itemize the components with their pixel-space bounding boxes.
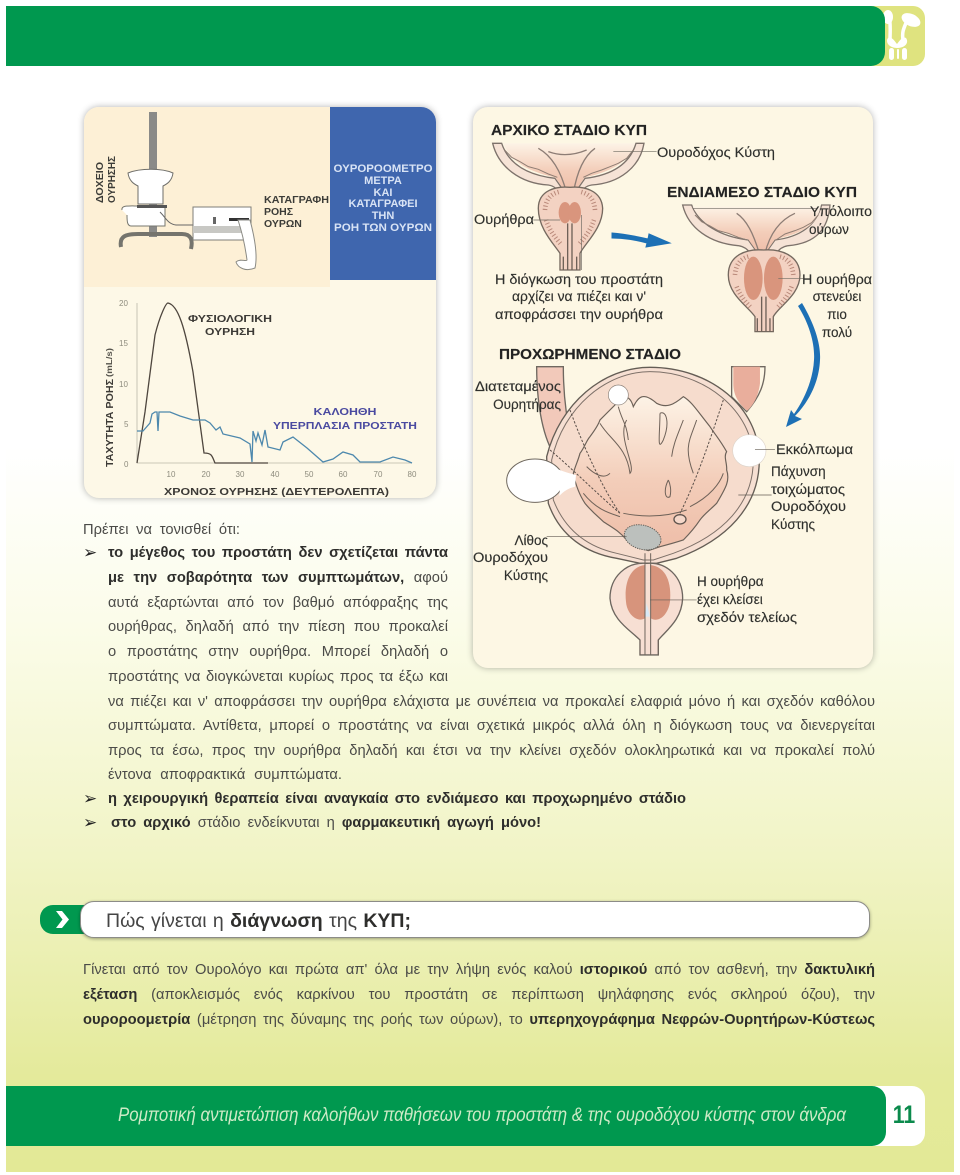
axis numbers: 30 (236, 470, 245, 479)
advanced stage diagram (507, 367, 775, 655)
stage labels: έχει κλείσει (697, 592, 763, 607)
stage labels: Λίθος (514, 533, 548, 548)
bullet arrow: ➢ (83, 543, 97, 563)
stage labels: σχεδόν τελείως (697, 610, 798, 625)
blue caption box (330, 107, 436, 280)
text block: diagnosis (83, 962, 875, 1028)
header band (6, 6, 925, 66)
axis numbers: 70 (374, 470, 383, 479)
stage labels (473, 123, 872, 625)
axis numbers: 60 (339, 470, 348, 479)
axis numbers: 0 (124, 460, 129, 469)
blue arrow: intermediate to advanced (786, 303, 820, 427)
stage labels: στενεύει (813, 289, 861, 304)
uroflowmeter device (121, 112, 256, 270)
device labels: ΟΥΡΩΝ (264, 218, 302, 230)
stage labels: πιο (827, 307, 847, 322)
text block: key points: ουρήθρας, δηλαδή από την πίεση που προκαλεί (108, 619, 448, 635)
section heading: Πώς γίνεται η διάγνωση της ΚΥΠ; (106, 910, 411, 932)
text block: key points: στο αρχικό στάδιο ενδείκνυται η φαρμακευτική αγωγή μόνο! (111, 815, 541, 831)
text block: diagnosis: ουροροομετρία (μέτρηση της δύναμης της ροής των ούρων), το υπερηχογράφημα Νεφρών-Ουρητήρων-Κύστεως (83, 1012, 875, 1028)
axis numbers: 40 (271, 470, 280, 479)
text block: diagnosis: Γίνεται από τον Ουρολόγο και πρώτα απ' όλα με την λήψη ενός καλού ιστορικού από τον ασθενή, την δακτυλική (83, 962, 875, 978)
stage labels: ούρων (809, 222, 849, 237)
intermediate stage diagram (683, 205, 830, 332)
diverticula (507, 459, 563, 502)
text block: key points: να πιέζει και ν' αποφράσσει την ουρήθρα ελάχιστα με συνέπεια να προκαλεί ελαφριά μόνο ή και σχεδόν καθόλου (108, 694, 875, 710)
stage labels: τοιχώματος (771, 482, 846, 497)
footer band (6, 1086, 925, 1146)
flow chart: ΤΑΧΥΤΗΤΑ ΡΟΗΣ (104, 379, 116, 467)
device labels: ΚΑΤΑΓΡΑΦΗ (264, 194, 329, 206)
prostate (610, 563, 683, 655)
flow chart: ΧΡΟΝΟΣ ΟΥΡΗΣΗΣ (ΔΕΥΤΕΡΟΛΕΠΤΑ) (164, 486, 389, 498)
bladder lumen (573, 397, 728, 551)
stage labels: Ουρητήρας (493, 397, 561, 412)
axis numbers: 50 (305, 470, 314, 479)
stage labels: Υπόλοιπο (810, 204, 872, 219)
heading box (80, 901, 870, 938)
stage labels: Η ουρήθρα (802, 272, 872, 287)
blue caption box: ΡΟΗ ΤΩΝ ΟΥΡΩΝ (334, 222, 432, 234)
axis numbers (119, 299, 417, 479)
stage labels: πολύ (822, 325, 852, 340)
stage labels: Ουροδόχος Κύστη (657, 145, 775, 160)
stage labels: Ουροδόχου (771, 499, 846, 514)
bladder stone (622, 521, 664, 554)
stage labels: ΕΝΔΙΑΜΕΣΟ ΣΤΑΔΙΟ ΚΥΠ (667, 185, 857, 201)
stage labels: ΠΡΟΧΩΡΗΜΕΝΟ ΣΤΑΔΙΟ (499, 347, 681, 363)
stage labels: Πάχυνση (771, 464, 826, 479)
panel: BPH stages (473, 107, 873, 668)
flow chart (104, 299, 417, 498)
text block: key points: με την σοβαρότητα των συμπτωμάτων, αφού (108, 570, 448, 586)
green chevron pill (40, 905, 100, 934)
header green bar (6, 6, 885, 66)
text block: key points: ο προστάτης στην ουρήθρα. Μπορεί δηλαδή ο (108, 644, 448, 660)
axis numbers: 15 (119, 339, 128, 348)
initial stage diagram (493, 143, 657, 270)
blue caption box: ΟΥΡΟΡΟΟΜΕΤΡΟ (334, 163, 433, 175)
leader lines (547, 449, 775, 600)
BPH curve (137, 412, 412, 463)
blue arrow: initial to intermediate (612, 233, 670, 247)
chart labels: ΦΥΣΙΟΛΟΓΙΚΗ (188, 313, 272, 325)
axis numbers: 10 (119, 380, 128, 389)
blue caption box: ΤΗΝ (372, 210, 394, 222)
stage labels: Κύστης (771, 517, 816, 532)
stage labels: Η ουρήθρα (697, 574, 764, 589)
axis numbers: 5 (124, 420, 129, 429)
axis numbers: 20 (119, 299, 128, 308)
page number tab (866, 1086, 925, 1146)
device labels (94, 156, 329, 230)
chart labels: ΟΥΡΗΣΗ (205, 326, 255, 338)
text block: diagnosis: εξέταση (αποκλεισμός ενός καρκίνου του προστάτη σε περίπτωση ψηλάφησης ενός σκληρού όζου), την (83, 987, 875, 1003)
text block: key points (83, 522, 875, 833)
device labels: ΟΥΡΗΣΗΣ (106, 156, 118, 203)
text block: key points: Πρέπει να τονισθεί ότι: (83, 522, 240, 538)
bullet arrow: ➢ (83, 813, 97, 833)
stage labels: Διατεταμένος (475, 379, 562, 394)
device labels: ΔΟΧΕΙΟ (94, 162, 106, 203)
text block: key points: το μέγεθος του προστάτη δεν σχετίζεται πάντα (108, 545, 448, 561)
stage labels: Ουροδόχου (473, 550, 548, 565)
bullet arrow: ➢ (83, 789, 97, 809)
blue caption box: ΚΑΤΑΓΡΑΦΕΙ (348, 198, 418, 210)
peach upper background (84, 107, 330, 287)
stage labels: Κύστης (504, 568, 548, 583)
stage labels: ΑΡΧΙΚΟ ΣΤΑΔΙΟ ΚΥΠ (491, 123, 647, 139)
axis numbers: 80 (408, 470, 417, 479)
stage labels: αποφράσσει την ουρήθρα (495, 307, 663, 322)
chart labels: ΥΠΕΡΠΛΑΣΙΑ ΠΡΟΣΤΑΤΗ (273, 420, 417, 432)
axis numbers: 20 (202, 470, 211, 479)
text block: key points: η χειρουργική θεραπεία είναι αναγκαία στο ενδιάμεσο και προχωρημένο στάδιο (108, 791, 686, 807)
header tab with icon (871, 6, 925, 66)
text block: key points: έντονα αποφρακτικά συμπτώματα. (108, 767, 342, 783)
stage labels: Η διόγκωση του προστάτη (495, 272, 663, 287)
stage labels: Ουρήθρα (474, 212, 534, 227)
stage labels: Εκκόλπωμα (776, 442, 853, 457)
text block: key points: προς τα έσω, προς την ουρήθρα δηλαδή και έτσι να την κλείνει σχεδόν ολοκληρωτικά και να προκαλεί πολύ (108, 743, 875, 759)
text block: key points: προστάτης να διογκώνεται κυρίως προς τα έξω και (108, 669, 448, 685)
text block: key points: συμπτώματα. Αντίθετα, μπορεί ο προστάτης να είναι σχετικά μικρός αλλά όλη η διόγκωση τους να διενεργείται (108, 718, 875, 734)
flow chart: (mL/s) (104, 348, 114, 377)
chart labels: ΚΑΛΟΗΘΗ (314, 406, 376, 418)
page number: 11 (893, 1101, 915, 1129)
normal curve (137, 303, 268, 463)
footer green bar (6, 1086, 886, 1146)
panel: uroflowmetry (84, 107, 436, 498)
chart labels (188, 313, 417, 432)
bladder wall (547, 367, 759, 563)
blue caption box: ΜΕΤΡΑ (364, 175, 402, 187)
device labels: ΡΟΗΣ (264, 206, 293, 218)
text block: key points: αυτά εξαρτώνται από τον βαθμό απόφραξης της (108, 595, 448, 611)
blue caption box: ΚΑΙ (374, 187, 392, 199)
section heading (40, 900, 872, 941)
stage labels: αρχίζει να πιέζει και ν' (512, 289, 646, 304)
axis numbers: 10 (167, 470, 176, 479)
